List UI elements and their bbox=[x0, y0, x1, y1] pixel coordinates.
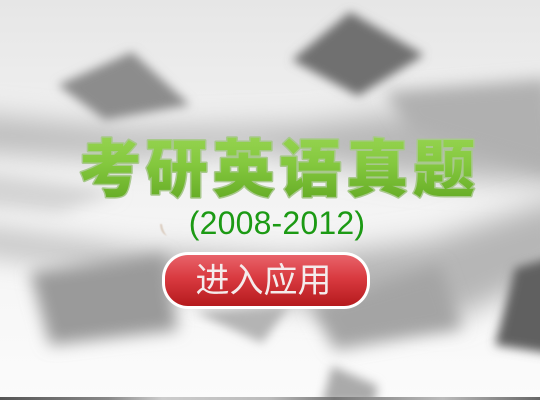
bottom strip bbox=[0, 397, 540, 400]
button: enter app: 进入应用 bbox=[196, 253, 332, 302]
small decorative mark bbox=[160, 224, 167, 236]
year range: (2008-2012) bbox=[189, 205, 365, 241]
button: enter app bbox=[162, 252, 370, 309]
title: 考研英语真题 bbox=[79, 119, 480, 209]
